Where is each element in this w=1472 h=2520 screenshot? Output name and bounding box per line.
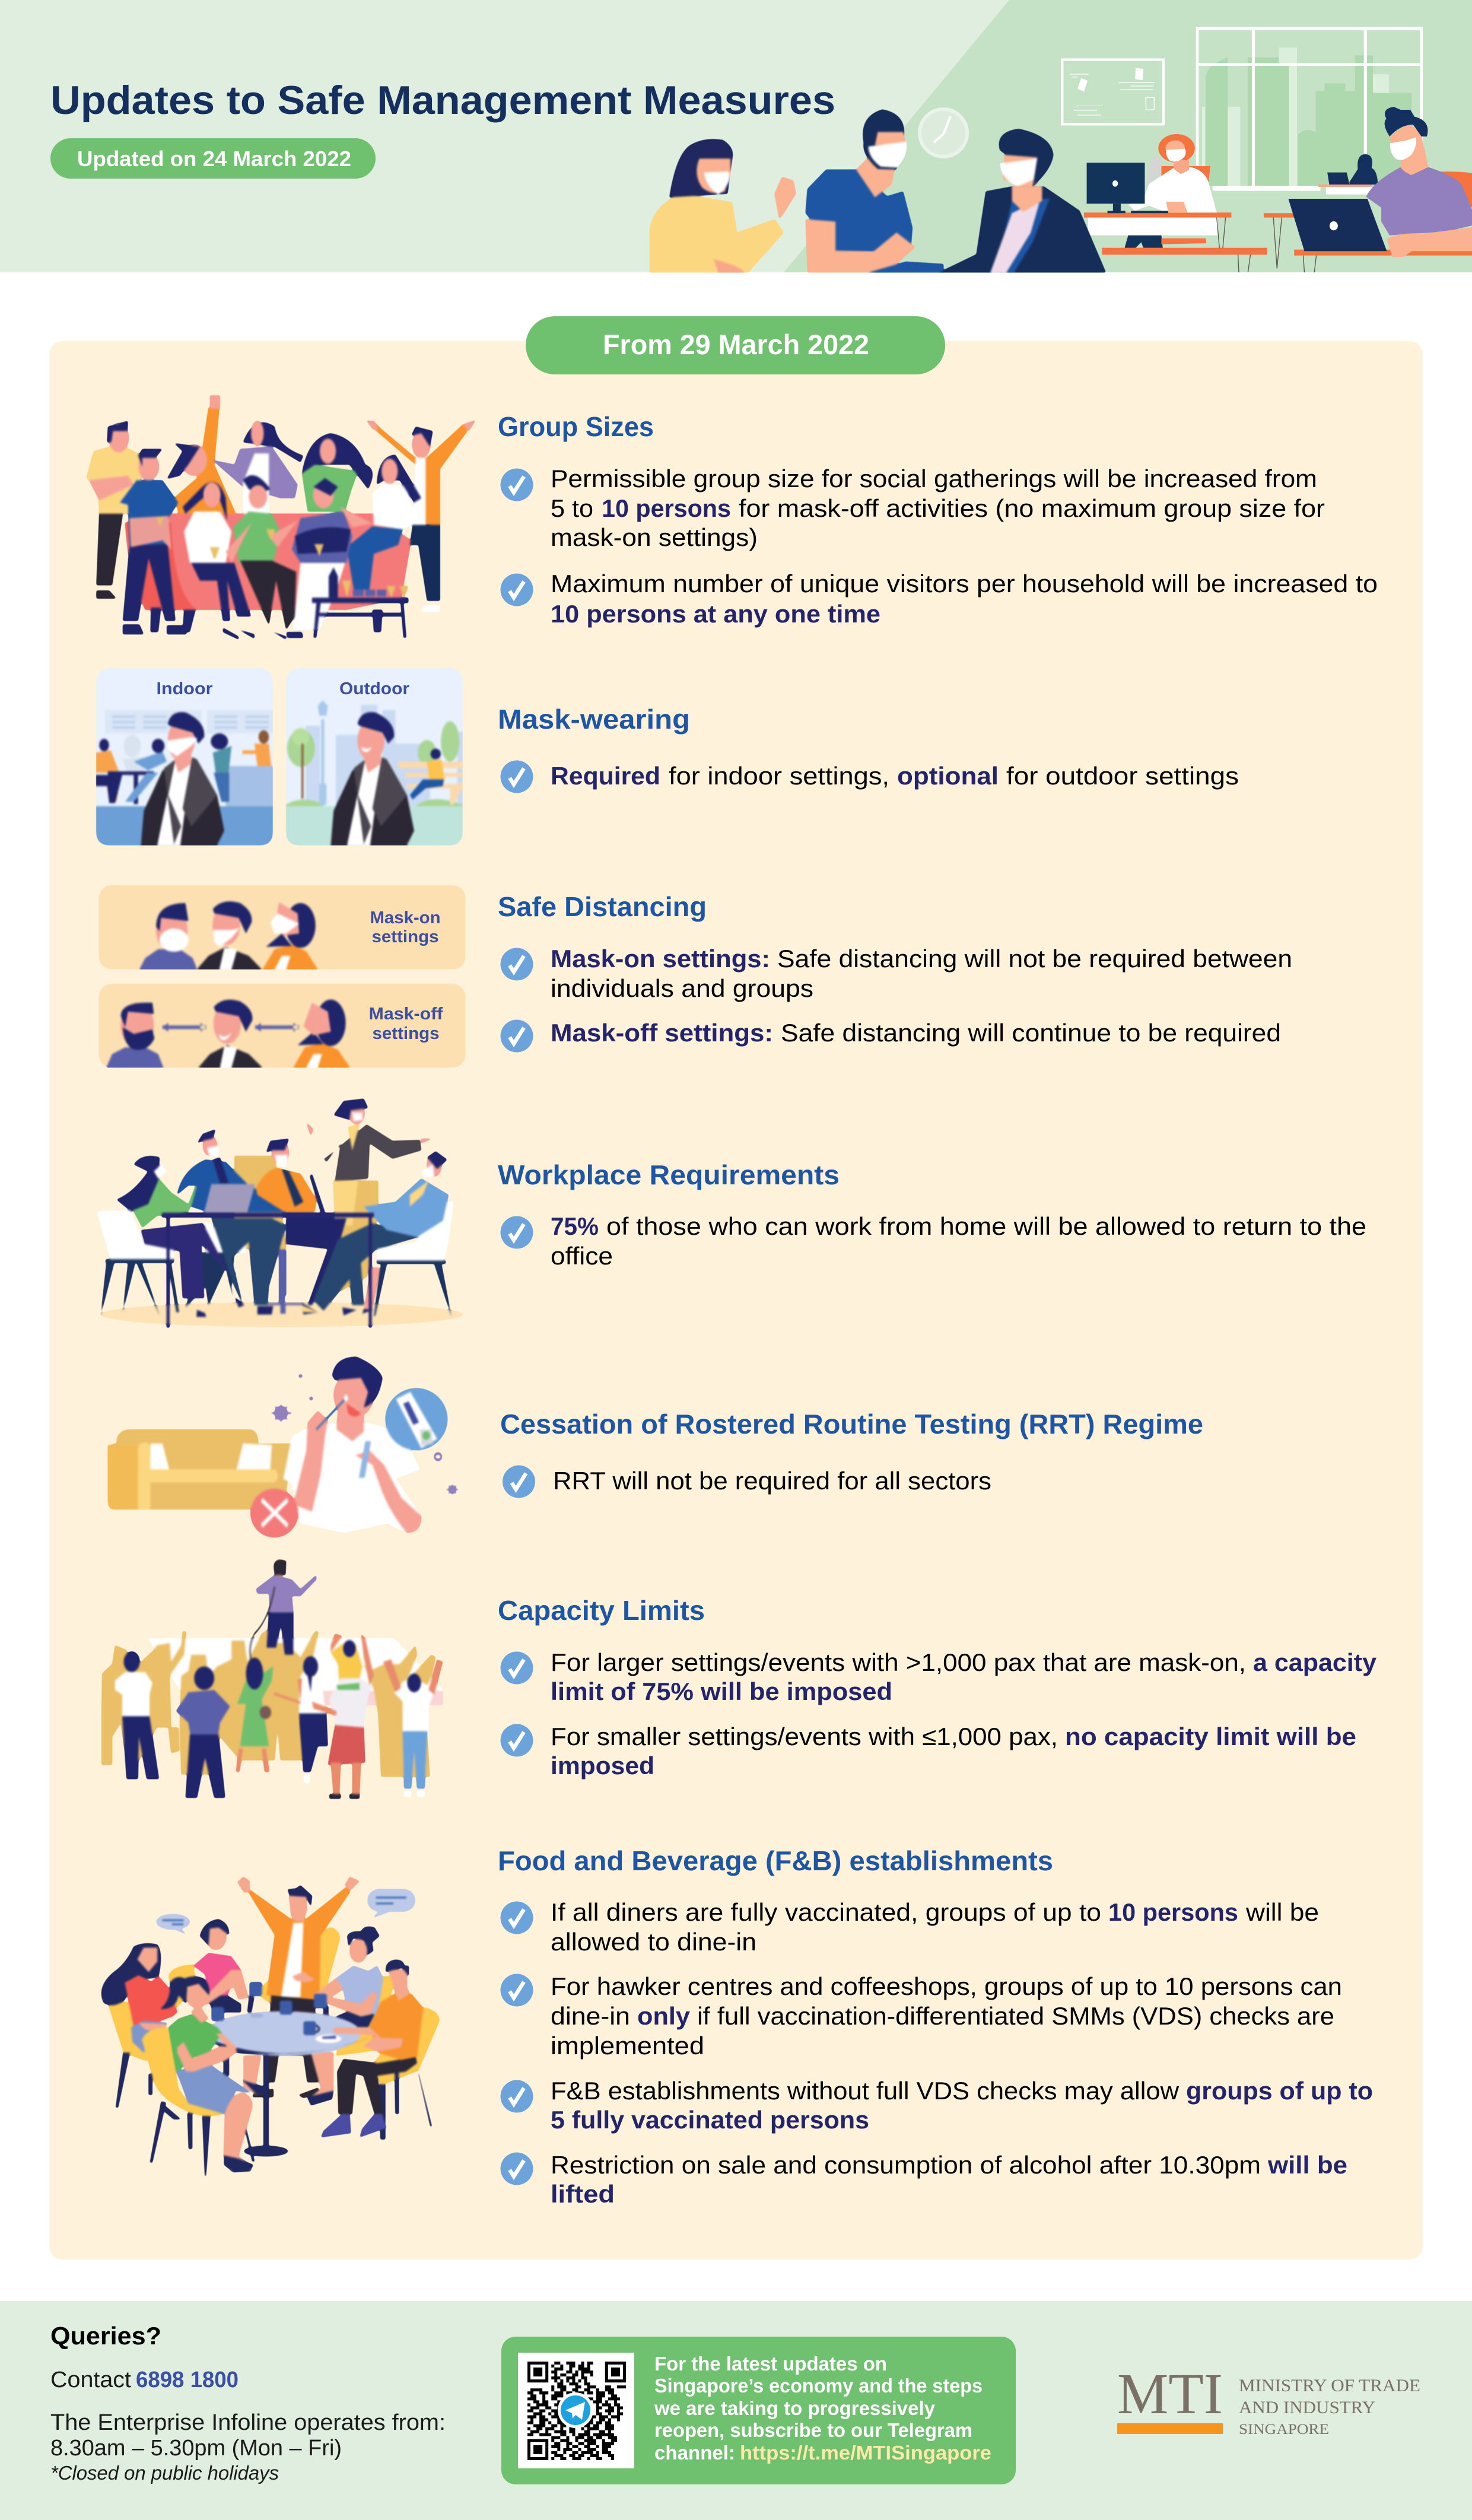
label: Mask-on settings [370,908,440,946]
heading: Workplace Requirements: Workplace Requirements [498,1159,840,1190]
Group Sizes text [498,411,1378,628]
telegram subscribe text: Singapore’s economy and the steps [654,2375,983,2397]
Safe Distancing text [498,891,1292,1053]
bullet: larger settings: For larger settings/events with >1,000 pax that are mask-on, [551,1648,1246,1676]
bullet: mask-off settings [501,1019,1281,1053]
MTI logo: MINISTRY OF TRADE [1239,2376,1420,2395]
bullet: larger settings [501,1648,1377,1705]
distance arrows [163,1023,299,1032]
heading: Safe Distancing: Safe Distancing [498,891,707,922]
bullet: masks indoor and outdoor [501,761,1239,793]
illustration: mask-wearing indoor and outdoor cards [96,668,462,845]
bullet: without VDS: 5 fully vaccinated persons [551,2106,869,2134]
RRT text [500,1409,1203,1498]
speech bubble right [368,1889,415,1918]
telegram subscribe text [654,2353,991,2464]
bullet: masks indoor and outdoor: Required [551,762,660,790]
main cream panel [49,341,1423,2260]
bullet: mask-off settings: Mask-off settings: [551,1019,773,1047]
bullet: without VDS: groups of up to [1186,2077,1373,2105]
mask-off card [99,984,465,1067]
bullet: alcohol: will be [1267,2151,1347,2179]
bullet: return to office: of those who can work from home will be allowed to return to the [606,1212,1366,1240]
heading: Cessation of RRT: Cessation of Rostered Routine Testing (RRT) Regime [500,1409,1203,1439]
bullet: gathering size: mask-on settings) [551,523,758,551]
bullet: masks indoor and outdoor: for indoor settings, [669,762,889,790]
bullet: mask-on settings: Mask-on settings: [551,945,770,973]
updated date pill [50,138,376,179]
bullet: alcohol [501,2151,1347,2208]
bullet: hawker centres: implemented [551,2032,704,2060]
queries contact block [50,2322,446,2484]
date pill: From 29 March 2022: From 29 March 2022 [603,329,869,360]
heading: Group Sizes: Group Sizes [498,411,654,442]
bullet: without VDS [501,2077,1373,2134]
bullet: fully vaccinated diners: 10 persons [1108,1898,1238,1926]
speech bubble left [157,1914,190,1935]
queries contact block: Contact [50,2368,131,2392]
bullet: hawker centres: if full vaccination-differentiated SMMs (VDS) checks are [697,2002,1334,2030]
bullet: mask-off settings: Safe distancing will continue to be required [781,1019,1281,1047]
label: Outdoor: Outdoor [339,679,409,698]
icon: not required cross [250,1489,298,1537]
queries contact block: 6898 1800 [136,2368,239,2392]
three people talking [650,109,1106,272]
illustration: rostered routine testing [108,1357,459,1537]
queries contact block: 8.30am – 5.30pm (Mon – Fri) [50,2436,342,2461]
bullet: fully vaccinated diners: will be [1245,1898,1319,1926]
bullet: larger settings: limit of 75% will be imposed [551,1677,892,1705]
telegram subscribe text: For the latest updates on [654,2353,887,2375]
bullet: household visitors [501,570,1378,628]
illustration: workplace meeting [97,1099,463,1328]
date pill: From 29 March 2022 [526,316,945,374]
bullet: mask-on settings: Safe distancing will not be required between [777,945,1292,973]
label: Mask-off settings [369,1005,443,1043]
telegram box [501,2337,1016,2484]
office background scene [1061,27,1472,272]
bullet: gathering size [501,465,1325,551]
label: Mask-on settings: Mask-on [370,908,440,927]
footer band [0,2301,1472,2520]
bullet: larger settings: a capacity [1253,1648,1377,1676]
queries contact block: The Enterprise Infoline operates from: [50,2410,446,2435]
MTI logo: MTI [1117,2362,1223,2426]
bullet: gathering size: 10 persons [602,494,731,522]
bullet: household visitors: 10 persons at any one time [551,600,880,628]
bullet: alcohol: Restriction on sale and consumption of alcohol after 10.30pm [551,2151,1261,2179]
Capacity Limits text [498,1595,1377,1779]
MTI logo: SINGAPORE [1239,2422,1329,2438]
illustration: crowd at event [101,1559,443,1799]
label: Mask-off settings: settings [373,1024,439,1043]
telegram subscribe text: channel: [654,2442,735,2464]
telegram subscribe text: reopen, subscribe to our Telegram [654,2419,972,2441]
bullet: masks indoor and outdoor: optional [897,762,999,790]
bullet: RRT: RRT will not be required for all sectors [553,1467,991,1495]
indoor card [96,668,273,845]
bullet: smaller settings [501,1723,1356,1779]
bullet: hawker centres: For hawker centres and coffeeshops, groups of up to 10 persons can [551,1972,1342,2000]
Workplace text [498,1159,1366,1270]
bullet: smaller settings: no capacity limit will be [1065,1723,1356,1750]
telegram subscribe text: we are taking to progressively [654,2397,936,2419]
title: Updates to Safe Management Measures [50,78,835,123]
bullet: return to office: office [551,1242,613,1270]
bullet: mask-on settings [501,945,1292,1002]
label: Mask-on settings: settings [371,927,439,946]
header banner [0,0,1472,272]
bullet: masks indoor and outdoor: for outdoor settings [1006,762,1239,790]
illustration: friends at dining table [101,1877,440,2176]
heading: Capacity Limits: Capacity Limits [498,1595,705,1626]
bullet: return to office [501,1212,1366,1270]
MTI logo: AND INDUSTRY [1239,2398,1375,2417]
illustration: safe distancing cards [99,885,465,1067]
bullet: alcohol: lifted [551,2180,615,2208]
bullet: hawker centres: only [637,2002,691,2030]
queries contact block: *Closed on public holidays [50,2462,279,2484]
updated date pill: Updated on 24 March 2022 [77,147,351,171]
bullet: hawker centres: dine-in [551,2002,630,2030]
bullet: gathering size: 5 to [551,494,593,522]
icon: telegram [558,2392,593,2428]
queries contact block: Queries? [50,2322,161,2350]
illustration: group on sofa [86,395,476,640]
bullet: smaller settings: imposed [551,1752,654,1779]
label: Mask-off settings: Mask-off [369,1005,443,1024]
bullet: without VDS: F&B establishments without full VDS checks may allow [551,2077,1179,2105]
bullet: hawker centres [501,1972,1342,2060]
label: Indoor: Indoor [157,679,212,698]
bullet: gathering size: for mask-off activities (no maximum group size for [739,494,1325,522]
heading: Food and Beverage: Food and Beverage (F&B) establishments [498,1845,1053,1876]
telegram subscribe text: https://t.me/MTISingapore [740,2442,991,2464]
mask-on card [99,885,465,969]
bullet: fully vaccinated diners: If all diners are fully vaccinated, groups of up to [551,1898,1101,1926]
bullet: fully vaccinated diners [501,1898,1319,1956]
bullet: mask-on settings: individuals and groups [551,974,813,1002]
bullet: return to office: 75% [551,1212,599,1240]
F&B text [498,1845,1373,2208]
outdoor card [286,668,462,845]
MTI logo [1117,2362,1420,2438]
clock [920,109,967,157]
bullet: fully vaccinated diners: allowed to dine-in [551,1928,756,1956]
bullet: household visitors: Maximum number of unique visitors per household will be increased to [551,570,1378,598]
QR code [527,2362,626,2460]
bullet: gathering size: Permissible group size for social gatherings will be increased from [551,465,1317,492]
heading: Mask-wearing: Mask-wearing [498,704,690,735]
bullet: smaller settings: For smaller settings/events with ≤1,000 pax, [551,1723,1058,1750]
Mask-wearing text [498,704,1239,793]
